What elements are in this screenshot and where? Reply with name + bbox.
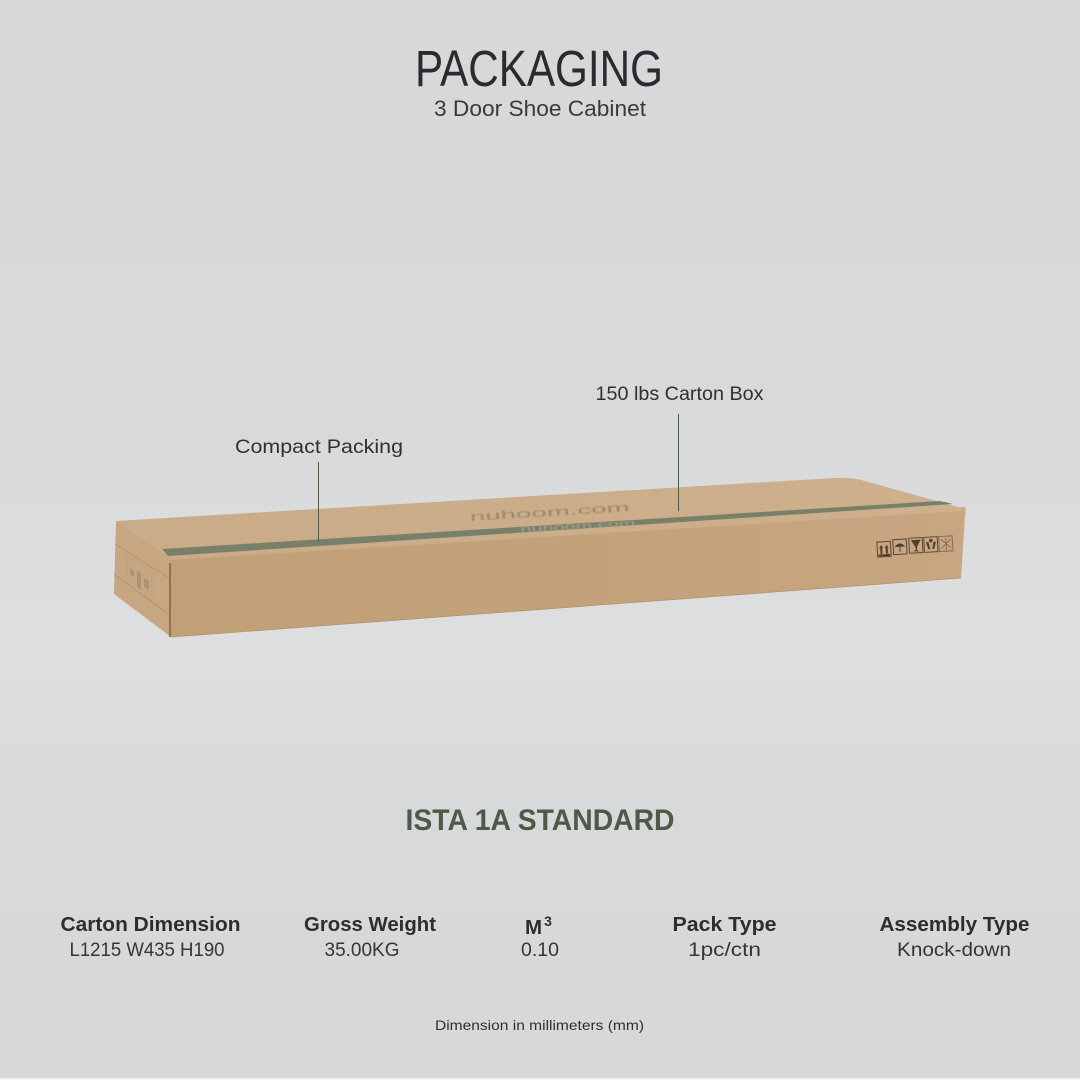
spec: assembly type xyxy=(880,913,1030,961)
spec: pack type xyxy=(672,913,776,961)
label: compact packing: Compact Packing xyxy=(235,436,403,458)
green tape xyxy=(162,501,953,556)
spec: volume: M xyxy=(525,916,542,939)
label: 150 lbs carton box: 150 lbs Carton Box xyxy=(596,384,764,405)
printed brand on tape: nuhoom.com xyxy=(520,518,636,535)
spec: pack type: Pack Type xyxy=(672,913,776,936)
box front face xyxy=(170,507,966,637)
spec: carton dimension xyxy=(60,913,240,961)
subtitle: 3 Door Shoe Cabinet xyxy=(434,96,646,121)
handling icons xyxy=(877,536,953,557)
spec: gross weight xyxy=(304,913,436,961)
spec: volume: 0.10 xyxy=(521,939,559,961)
spec: carton dimension: Carton Dimension xyxy=(60,913,240,936)
spec: assembly type: Knock-down xyxy=(897,939,1011,961)
spec: gross weight: Gross Weight xyxy=(304,913,436,936)
spec: assembly type: Assembly Type xyxy=(880,913,1030,936)
spec: volume: 3 xyxy=(544,913,552,929)
box top face xyxy=(116,478,965,560)
spec: gross weight: 35.00KG xyxy=(324,939,400,961)
footnote: Dimension in millimeters (mm) xyxy=(435,1017,644,1033)
title: PACKAGING xyxy=(415,40,663,97)
spec: volume xyxy=(521,913,559,961)
box left end face xyxy=(114,521,171,637)
printed brand on lid: nuhoom.com xyxy=(469,500,630,524)
standard heading: ISTA 1A STANDARD xyxy=(406,804,674,837)
carton box xyxy=(114,478,966,637)
spec: carton dimension: L1215 W435 H190 xyxy=(70,939,225,961)
spec: pack type: 1pc/ctn xyxy=(688,939,761,961)
